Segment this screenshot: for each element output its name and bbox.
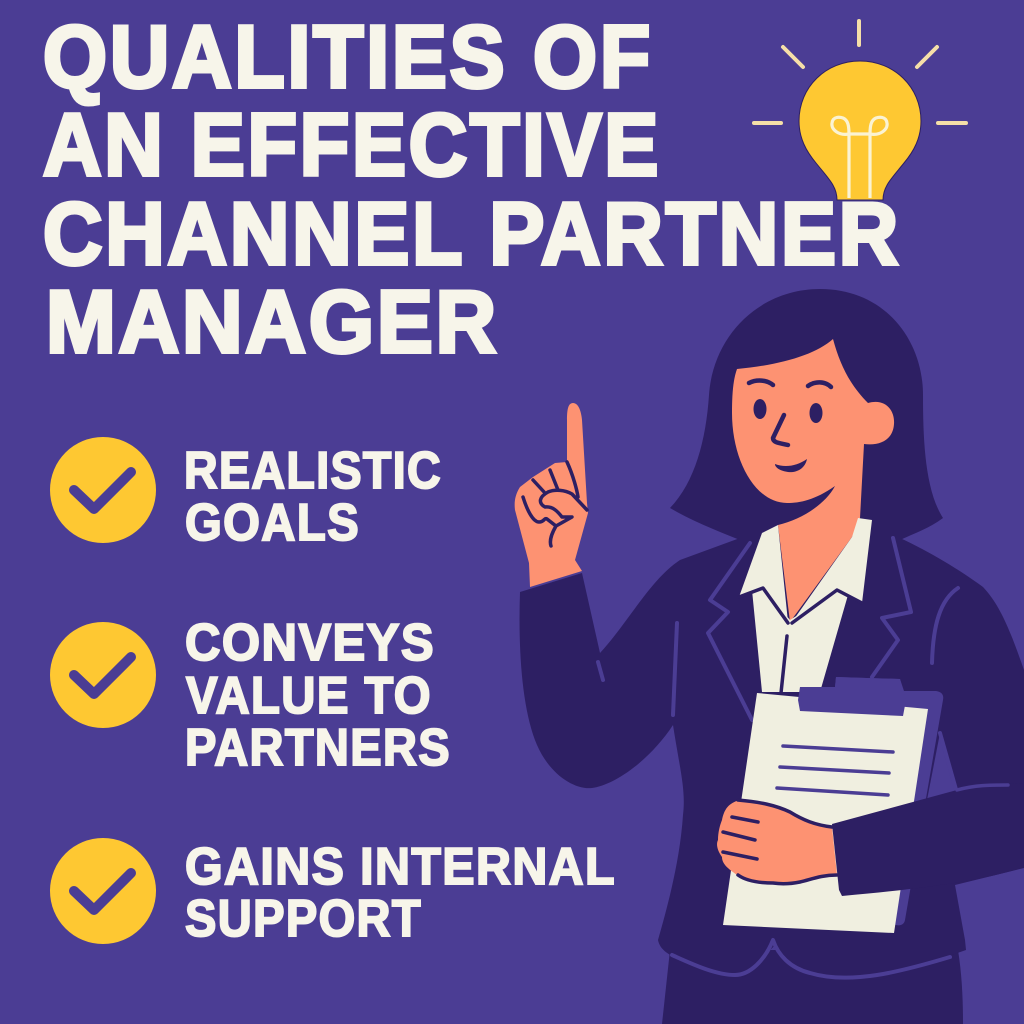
icon: check badge 2 [50,622,156,728]
jacket lapel and seam lines [598,538,958,978]
title [43,7,901,371]
list item: gains internal support [50,838,616,948]
neck and face [732,339,894,622]
sleeve highlight [957,785,1008,790]
label: realistic goals: REALISTIC [184,442,442,500]
lavender gap between body and arm [927,733,957,800]
hand on clipboard [717,800,837,884]
collar and placket lines [739,588,862,693]
label: realistic goals: GOALS [185,494,360,552]
icon: check badge 1 [50,437,156,543]
skirt [662,950,963,1024]
list item: conveys value to partners [50,614,451,777]
title: QUALITIES OF [43,7,653,106]
label: gains internal support: GAINS INTERNAL [185,838,616,896]
label: realistic goals [184,442,442,552]
title: AN EFFECTIVE [43,95,661,194]
clipboard [723,677,943,933]
face features [749,381,831,472]
illustration: woman with clipboard [515,289,1024,1024]
icon: check badge 3 [50,838,156,944]
left collar [739,525,788,622]
label: gains internal support [185,838,616,948]
jacket [520,538,1024,980]
sleeve: right arm [832,783,1024,896]
skin: raised hand [515,403,588,587]
label: conveys value to partners: PARTNERS [185,719,451,777]
label: conveys value to partners: CONVEYS [185,614,435,672]
label: conveys value to partners: VALUE TO [186,667,432,725]
shirt [752,588,848,692]
finger creases [523,462,587,546]
title: MANAGER [46,272,499,371]
label: conveys value to partners [185,614,451,777]
title: CHANNEL PARTNER [43,184,901,283]
hair [670,289,943,540]
icon: light bulb [754,21,966,200]
list item: realistic goals [50,437,442,552]
label: gains internal support: SUPPORT [185,890,422,948]
right collar [792,518,872,622]
